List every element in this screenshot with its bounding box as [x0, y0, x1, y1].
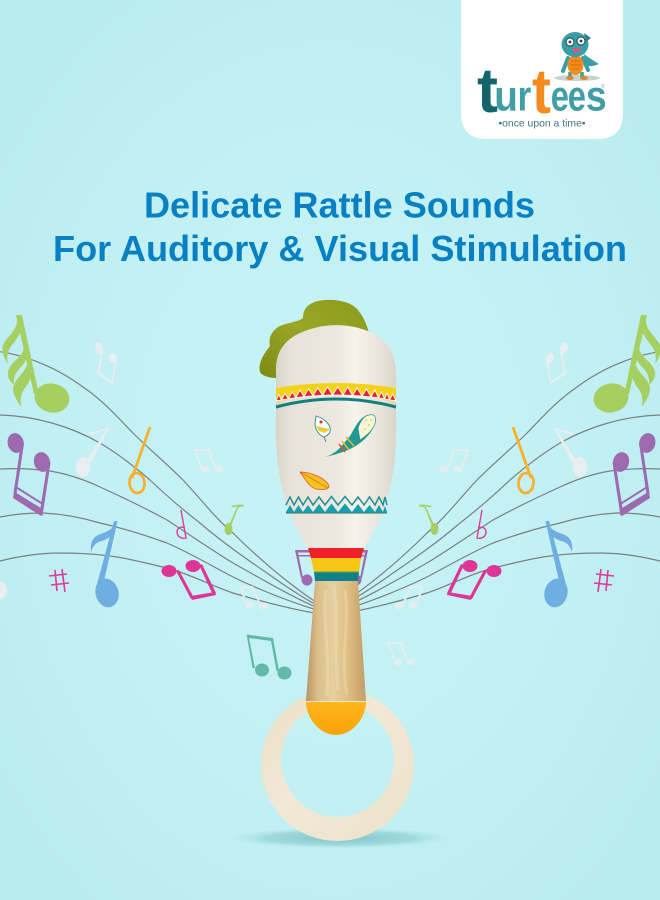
icon: small green note right	[418, 504, 438, 535]
icon: purple beamed notes right	[611, 431, 658, 516]
icon: orange note right	[513, 427, 534, 494]
logo wordmark: t	[532, 56, 551, 127]
yellow leaf decoration	[300, 472, 329, 490]
icon: pale beamed notes top	[93, 341, 118, 384]
body bottom zigzag band	[286, 496, 387, 513]
icon: pale beamed notes mid right	[440, 449, 469, 472]
logo tagline: •once upon a time•	[498, 118, 586, 130]
small leaf decoration	[315, 416, 330, 442]
ground shadow	[225, 827, 455, 849]
logo wordmark: s	[586, 72, 607, 120]
teether ring	[261, 689, 414, 841]
icon: large green note	[2, 315, 72, 416]
icon: purple note behind rattle right	[343, 550, 368, 586]
wooden handle	[306, 581, 366, 701]
logo wordmark: u	[494, 72, 518, 120]
logo wordmark: ®	[601, 83, 605, 90]
icon: purple note behind rattle	[295, 550, 320, 586]
icon: blue note right	[541, 521, 572, 610]
right music notes	[343, 315, 660, 610]
icon: small pink note right	[477, 510, 486, 538]
icon: turtle mascot	[554, 32, 600, 81]
rattle body	[276, 325, 396, 550]
icon: pale beamed notes bottom right	[394, 586, 424, 610]
logo panel	[461, 0, 623, 139]
icon: pink beamed notes	[162, 560, 216, 600]
icon: pink sharp sign	[49, 569, 69, 592]
icon: pale beamed notes under right staff	[387, 642, 415, 666]
rattle leaf teether	[260, 300, 369, 378]
logo wordmark: e	[568, 72, 586, 121]
icon: small green note	[224, 504, 245, 535]
icon: pale single note	[76, 428, 109, 477]
icon: teal beamed notes	[246, 634, 292, 680]
logo wordmark: t	[477, 56, 498, 126]
rattle	[260, 300, 414, 841]
icon: purple beamed notes	[5, 431, 52, 516]
icon: pale beamed notes top right	[545, 341, 570, 384]
icon: small pink note	[177, 510, 186, 538]
icon: blue note	[91, 521, 122, 610]
logo wordmark: r	[518, 72, 531, 120]
body top band	[276, 383, 396, 407]
orange end cap	[306, 702, 366, 735]
icon: pale note at left edge	[0, 582, 7, 598]
collar bands	[308, 548, 364, 581]
title	[53, 184, 627, 269]
right music staff lines	[340, 352, 660, 614]
icon: large green note right	[591, 315, 660, 416]
icon: pale single note right	[554, 428, 587, 477]
icon: pale beamed notes mid	[194, 449, 224, 472]
logo wordmark: e	[551, 72, 569, 121]
icon: pink sharp sign right	[594, 569, 614, 592]
icon: pale beamed notes bottom	[239, 586, 268, 610]
left music notes	[0, 315, 320, 680]
left music staff lines	[0, 352, 320, 614]
logo wordmark	[477, 56, 607, 127]
title: For Auditory & Visual Stimulation	[53, 228, 627, 269]
icon: pink beamed notes right	[447, 560, 502, 600]
title: Delicate Rattle Sounds	[144, 184, 535, 226]
icon: orange note	[129, 427, 150, 494]
feather decoration	[325, 415, 376, 457]
